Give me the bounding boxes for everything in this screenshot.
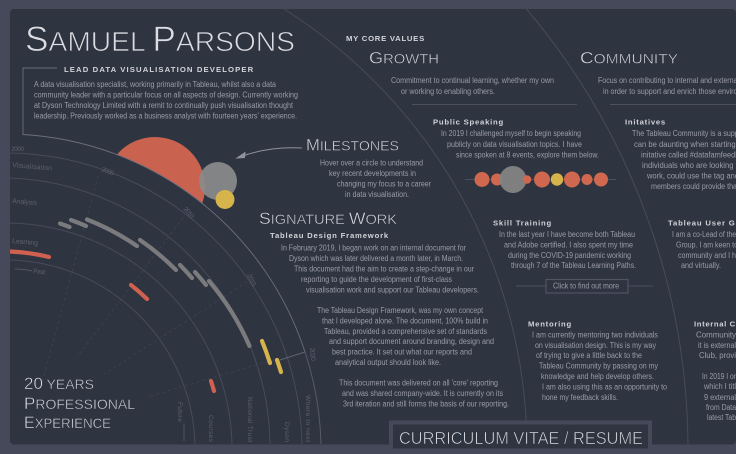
job title: LEAD DATA VISUALISATION DEVELOPER (64, 65, 254, 74)
skill training text: In the last year I have become both Tableau (499, 230, 635, 239)
signature work text: visualisation work and support our Tableau developers. (306, 286, 479, 294)
mentoring text (532, 330, 667, 402)
timeline year spokes (40, 176, 280, 397)
timeline category labels: Learning (12, 238, 38, 247)
years of experience: EXPERIENCE (24, 413, 111, 432)
signature work heading: SIGNATURE WORK (259, 209, 398, 228)
timeline category labels: Analysis (12, 198, 38, 207)
growth text (391, 76, 554, 96)
growth heading: GROWTH (369, 50, 439, 68)
signature work text: that I developed alone. The document, 100% build in (322, 316, 488, 326)
curriculum vitae box (391, 422, 650, 450)
find out more button (516, 280, 653, 293)
public speaking text: publicly on data visualisation topics. I have (447, 140, 582, 149)
title: SAMUEL PARSONS (25, 20, 295, 59)
signature work text: Tableau, provided a comprehensive set of standards (324, 327, 487, 336)
milestone circle: large red (117, 137, 205, 203)
internal community heading: Internal C (694, 320, 736, 328)
timeline years: 2020 (308, 348, 316, 361)
timeline years: 2015 (245, 273, 257, 288)
tableau user group text (672, 230, 736, 270)
initiatives text (632, 129, 736, 191)
signature work text: reporting to guide the development of first-class (301, 275, 452, 284)
mentoring text: of trying to give a little back to the (536, 351, 642, 360)
initiatives heading: Initatives (625, 118, 666, 126)
biography: at Dyson Technology Limited with a remit to continually push visualisation thought (34, 101, 294, 110)
find out more button: Click to find out more (553, 282, 619, 291)
past and future arrows (15, 269, 184, 441)
skill training text: and Adobe certified. I also spent my time (504, 240, 633, 250)
mentoring text: knowledge and help develop others. (541, 372, 654, 381)
timeline category labels: Where to next (304, 395, 311, 442)
signature work text: This document was delivered on all 'core' reporting (339, 378, 498, 388)
biography: community leader with a particular focus on all aspects of design. Currently working (34, 90, 298, 100)
timeline years: 2000 (11, 146, 24, 153)
signature work text: best practice. It set out what our reports and (332, 348, 472, 356)
public speaking heading: Public Speaking (433, 118, 504, 126)
mentoring text: hone my feedback skills. (542, 393, 618, 402)
milestones text: in data visualisation. (345, 190, 409, 199)
years of experience (24, 374, 135, 432)
timeline category labels (12, 162, 311, 443)
signature work text (281, 244, 509, 408)
growth text: Commitment to continual learning, whether my own (391, 76, 554, 85)
core values label: MY CORE VALUES (346, 34, 425, 43)
milestones text: changing my focus to a career (337, 180, 431, 188)
speaking events bubbles (465, 166, 616, 193)
timeline years: 2010 (181, 206, 195, 221)
public speaking text: In 2019 I challenged myself to begin speaking (441, 129, 581, 138)
section arcs (284, 9, 688, 444)
skill training heading: Skill Training (493, 218, 552, 228)
mentoring text: I am also using this as an opportunity to (542, 382, 667, 392)
timeline disc mask (105, 155, 202, 237)
signature work text: The Tableau Design Framework, was my own concept (317, 306, 484, 315)
timeline category labels: Past (33, 268, 46, 276)
signature work text: and support document around branding, design and (329, 337, 494, 346)
biography (34, 80, 298, 120)
red learning bars (10, 252, 214, 391)
signature work text: and was shared company-wide. It is currently on its (342, 389, 503, 398)
mentoring text: Tableau Community by passing on my (539, 362, 658, 370)
yellow career bars (262, 341, 281, 372)
signature work text: This document had the aim to create a step-change in our (294, 264, 474, 274)
outer timeline arc and bracket (23, 68, 305, 360)
skill training text (499, 230, 636, 270)
signature work subheading: Tableau Design Framework (270, 231, 389, 240)
biography: leadership. Previously worked as a business analyst with fourteen years' experience. (34, 112, 297, 120)
curriculum vitae box: CURRICULUM VITAE / RESUME (399, 428, 643, 448)
public speaking text (441, 129, 599, 160)
public speaking text: since spoken at 8 events, explore them below. (456, 150, 599, 160)
internal community text (696, 330, 736, 422)
arrow to milestones (237, 148, 302, 158)
value dividers (412, 104, 736, 106)
timeline category labels: Visualisation (12, 162, 52, 172)
tableau user group text: and virtually. (681, 261, 721, 270)
milestone circle: yellow (216, 190, 234, 209)
years of experience: PROFESSIONAL (24, 394, 135, 413)
mentoring text: I am currently mentoring two individuals (532, 330, 658, 340)
internal community text: Community (696, 330, 736, 340)
mentoring heading: Mentoring (528, 320, 572, 328)
mentoring text: on visualisation design. This is my way (535, 341, 656, 350)
years of experience: 20 YEARS (24, 374, 94, 393)
timeline years: 2005 (100, 166, 115, 177)
skill training text: during the COVID-19 pandemic working (508, 251, 631, 260)
signature work text: 3rd iteration and still forms the basis of our reporting. (343, 400, 509, 408)
signature work text: Dyson which was later delivered a month later, in March. (289, 254, 463, 263)
milestones text: key recent developments in (329, 169, 416, 178)
skill training text: through 7 of the Tableau Learning Paths. (511, 261, 636, 270)
timeline rings (10, 153, 302, 444)
signature work text: analytical output should look like. (335, 358, 441, 367)
growth text: or working to enabling others. (401, 87, 495, 96)
grey career bars (60, 220, 250, 346)
milestones heading: MILESTONES (306, 136, 399, 154)
community text (598, 76, 736, 96)
timeline years (11, 146, 316, 361)
signature work text: In February 2019, I began work on an internal document for (281, 244, 466, 252)
community heading: COMMUNITY (580, 50, 678, 68)
milestone circle: grey (199, 162, 237, 200)
biography: A data visualisation specialist, working primarily in Tableau, whilst also a data (34, 80, 276, 89)
timeline category labels: Courses (207, 415, 214, 443)
milestones text (320, 158, 431, 199)
timeline category labels: Dyson (283, 422, 290, 442)
timeline category labels: Future (176, 402, 183, 422)
milestones text: Hover over a circle to understand (320, 158, 423, 168)
timeline category labels: National Trust (246, 397, 253, 442)
